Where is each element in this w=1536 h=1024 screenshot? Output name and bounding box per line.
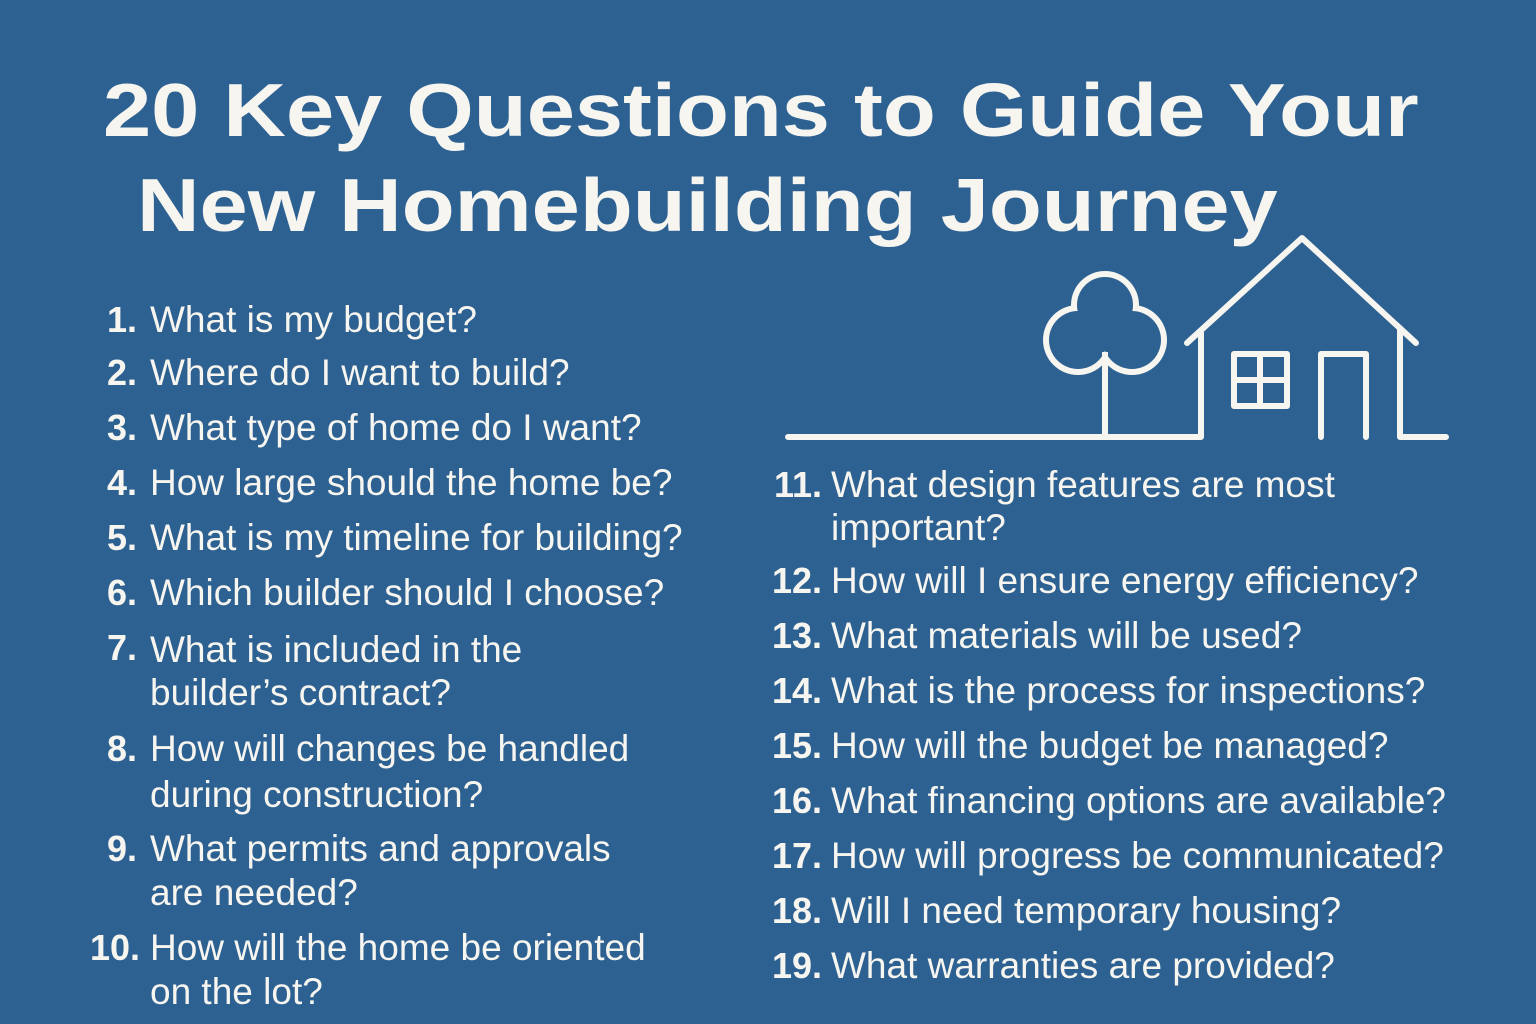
right question list: 12. [772, 560, 822, 601]
left question list: How large should the home be? [150, 462, 672, 503]
right question list: 16. [772, 780, 822, 821]
left question list: How will changes be handled [150, 728, 629, 769]
right question list: 13. [772, 615, 822, 656]
left question list: 1. [107, 299, 137, 340]
left question list: are needed? [150, 872, 358, 913]
right question list: Will I need temporary housing? [831, 890, 1341, 931]
right question list: 14. [772, 670, 822, 711]
right question list: important? [831, 507, 1006, 548]
left question list: What type of home do I want? [150, 407, 642, 448]
left question list: Which builder should I choose? [150, 572, 664, 613]
left question list: 6. [107, 572, 137, 613]
right question list: What design features are most [831, 464, 1335, 505]
left question list: 8. [107, 728, 137, 769]
left question list [90, 299, 683, 1012]
left question list: during construction? [150, 774, 483, 815]
right question list: What warranties are provided? [831, 945, 1335, 986]
right question list: 17. [772, 835, 822, 876]
left question list: 7. [107, 627, 137, 668]
left question list: What is included in the [150, 629, 522, 670]
right question list: What materials will be used? [831, 615, 1302, 656]
right question list: 15. [772, 725, 822, 766]
left question list: 2. [107, 352, 137, 393]
left question list: on the lot? [150, 971, 323, 1012]
title: 20 Key Questions to Guide Your [103, 68, 1419, 152]
left question list: 3. [107, 407, 137, 448]
right question list: 11. [774, 464, 822, 505]
title: New Homebuilding Journey [137, 163, 1278, 247]
left question list: 9. [107, 828, 137, 869]
right question list [772, 464, 1446, 986]
left question list: Where do I want to build? [150, 352, 570, 393]
left question list: What permits and approvals [150, 828, 611, 869]
left question list: 4. [107, 462, 137, 503]
right question list: How will progress be communicated? [831, 835, 1444, 876]
title [103, 68, 1419, 247]
right question list: 19. [772, 945, 822, 986]
right question list: What financing options are available? [831, 780, 1446, 821]
right question list: What is the process for inspections? [831, 670, 1425, 711]
right question list: How will I ensure energy efficiency? [831, 560, 1418, 601]
left question list: builder’s contract? [150, 672, 451, 713]
left question list: 5. [107, 517, 137, 558]
left question list: How will the home be oriented [150, 927, 646, 968]
left question list: 10. [90, 927, 140, 968]
right question list: How will the budget be managed? [831, 725, 1388, 766]
left question list: What is my timeline for building? [150, 517, 683, 558]
left question list: What is my budget? [150, 299, 477, 340]
right question list: 18. [772, 890, 822, 931]
